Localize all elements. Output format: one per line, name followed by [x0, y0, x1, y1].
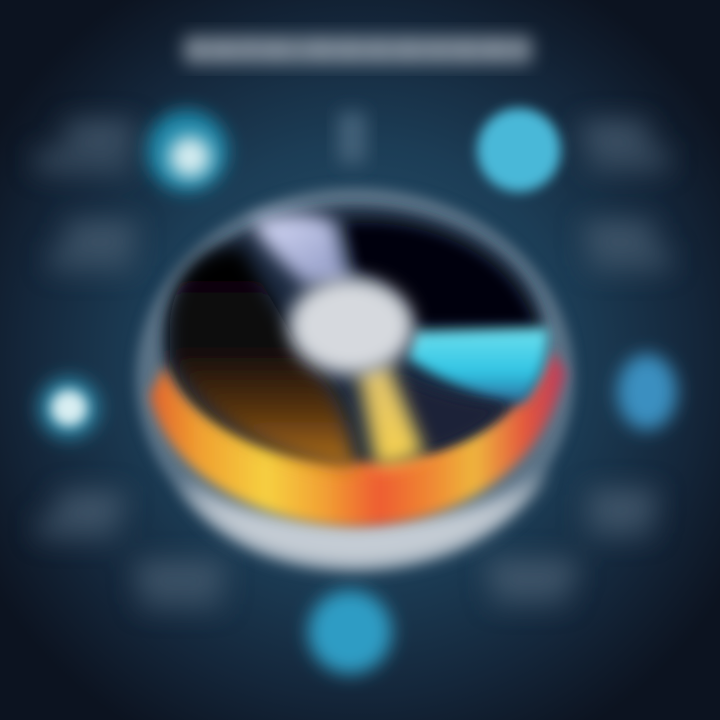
- centre hub: [289, 278, 413, 374]
- black upper right sector: [345, 223, 534, 325]
- icon: right circle: [617, 354, 677, 430]
- title: DATA RECOVERY: [185, 34, 531, 64]
- cyan sector: [408, 328, 548, 402]
- rainbow band: [150, 350, 566, 526]
- icon: top left circle: [146, 110, 228, 192]
- lavender light sector: [252, 214, 350, 285]
- disc outer ring: [136, 188, 574, 568]
- icon: left circle: [38, 377, 100, 439]
- yellow ray: [358, 362, 424, 466]
- central disc chart: [136, 188, 574, 568]
- icon: bottom circle: [308, 590, 392, 674]
- disc inner surface: [165, 207, 545, 473]
- brown sector: [170, 248, 355, 470]
- icon: top right circle: [477, 108, 561, 192]
- disc lower white rim: [180, 470, 548, 568]
- dark lower right sector: [395, 375, 505, 450]
- text block: right column labels: [488, 124, 670, 602]
- text block: left column labels: [36, 124, 224, 606]
- icon: top centre symbol: [338, 112, 366, 164]
